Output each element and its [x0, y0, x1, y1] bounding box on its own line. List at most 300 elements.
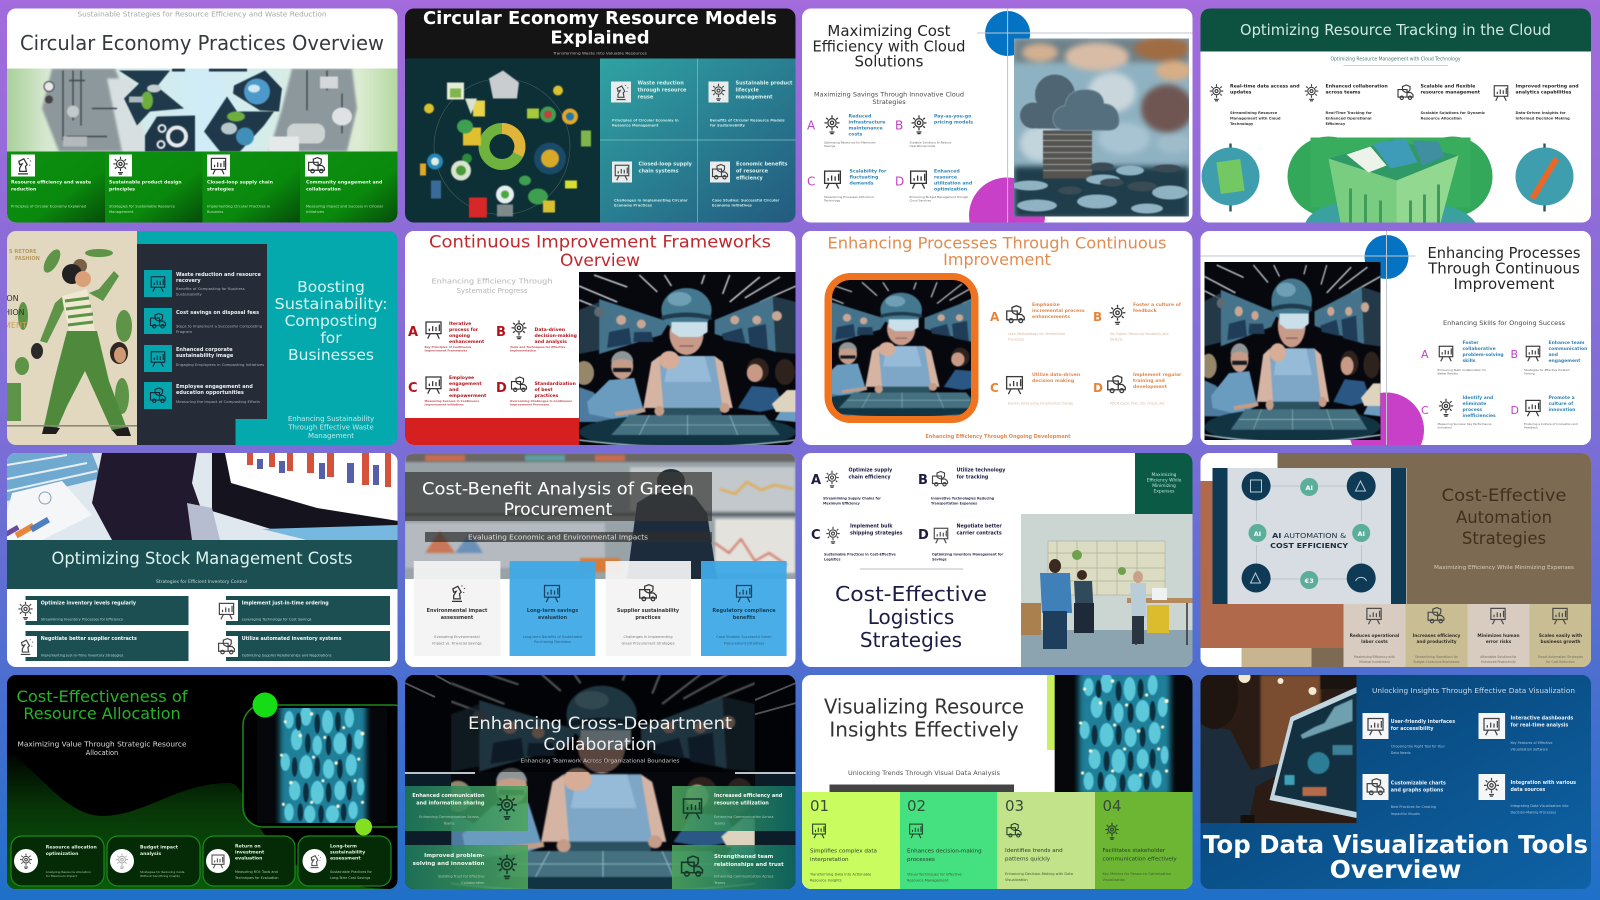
- card notes: Techniques for Evaluation: [234, 876, 279, 880]
- title: Efficiency with Cloud: [812, 38, 966, 56]
- feature headings: User-friendly interfaces: [1391, 719, 1455, 725]
- benefit tile: bottom right: Strengthened team: [714, 854, 774, 860]
- quadrant headings: through resource: [638, 88, 687, 94]
- item notes: Indicators: [1438, 426, 1452, 430]
- decorative green wave: [7, 750, 398, 889]
- item headings: Implement bulk: [850, 524, 893, 530]
- title: Resource Allocation: [23, 704, 181, 723]
- list headings: Waste reduction and resource: [176, 272, 262, 278]
- card headings: Resource allocation: [46, 844, 97, 850]
- item headings: Implement regular: [1133, 372, 1182, 378]
- column notes: Business: [207, 210, 223, 214]
- benefit headings: business growth: [1541, 639, 1580, 645]
- item letters: D: [1510, 404, 1519, 417]
- item headings: communication: [1548, 346, 1587, 352]
- item headings: Optimize supply: [848, 468, 893, 474]
- item notes: Defects: [1110, 338, 1123, 342]
- item letters: A: [408, 325, 418, 340]
- image: cloud on coins: [1012, 36, 1193, 218]
- title: Overview: [1330, 855, 1461, 884]
- illustration: woman with leaves: HION: [4, 308, 25, 317]
- list notes: Program: [176, 329, 192, 334]
- panel: Continuous Improvement Frameworks Overview: [405, 231, 796, 450]
- column notes: Resource Insights: [810, 878, 842, 882]
- item headings: collaborative: [1462, 346, 1496, 352]
- subtitle: Enhancing Skills for Ongoing Success: [1443, 321, 1565, 327]
- column notes: [809, 872, 1171, 882]
- list headings: [176, 272, 262, 396]
- item headings: Scalability for: [850, 168, 887, 174]
- benefit tile: bottom left: [405, 845, 528, 889]
- feature notes: Best Practices for Creating: [1391, 805, 1436, 809]
- illustration: woman with leaves: ION: [4, 294, 19, 303]
- benefit tile: bottom right: Teams: [713, 881, 725, 885]
- benefit notes: Affordable Solutions for: [1480, 655, 1517, 659]
- title: Top Data Visualization Tools: [1203, 830, 1588, 859]
- list icons: [144, 270, 172, 409]
- item notes: Transportation Expenses: [931, 502, 977, 506]
- list notes: Measuring the Impact of Composting Efforts: [176, 399, 260, 404]
- subtitle: Management: [308, 432, 354, 440]
- subtitle: Enhancing Efficiency Through: [432, 278, 552, 286]
- feature notes: Data Needs: [1391, 751, 1411, 755]
- panel: Circular Economy Practices Overview: [7, 8, 398, 222]
- title: Strategies: [1462, 529, 1546, 548]
- feature headings: Customizable charts: [1391, 780, 1446, 786]
- item letters: B: [1093, 310, 1102, 324]
- card headings: evaluation: [235, 856, 262, 862]
- item notes: Maximum Efficiency: [823, 502, 861, 506]
- item notes: [1008, 332, 1168, 406]
- list notes: Leveraging Technology for Cost Savings: [242, 618, 312, 622]
- item headings: Employee: [449, 375, 474, 381]
- list headings: Negotiate better supplier contracts: [41, 636, 137, 642]
- column headings: strategies: [207, 186, 234, 192]
- subtitle: Strategies: [872, 98, 906, 106]
- column headings: principles: [109, 186, 135, 192]
- feature notes: Choosing the Right Tool for Your: [1391, 744, 1445, 748]
- feature notes: Visualization Software: [1510, 748, 1548, 752]
- title: Circular Economy Resource Models: [423, 8, 777, 29]
- subtitle: Unlocking Trends Through Visual Data Analysis: [848, 769, 1001, 777]
- column numbers: 04: [1102, 797, 1122, 815]
- quadrant icons: [611, 82, 730, 182]
- column notes: [11, 205, 384, 214]
- feature notes: Streamlining Resource: [1230, 111, 1278, 115]
- item headings: decision-making: [534, 333, 577, 339]
- feature notes: Key Features of Effective: [1510, 741, 1553, 745]
- feature notes: Impactful Visuals: [1391, 812, 1420, 816]
- illustration: dashboards and analyst: [5, 453, 398, 540]
- quadrant notes: for Sustainability: [710, 124, 746, 128]
- title: Improvement: [943, 250, 1051, 269]
- benefit tile: bottom left: Collaboration: [461, 881, 484, 885]
- item letters: A: [990, 310, 1000, 324]
- item headings: utilization and: [934, 180, 972, 186]
- item headings: [848, 114, 973, 192]
- title: Optimizing Resource Tracking in the Cloud: [1240, 21, 1551, 39]
- list headings: education opportunities: [176, 390, 244, 396]
- item notes: Improvement Frameworks: [424, 348, 467, 352]
- subtitle: [18, 740, 186, 757]
- item notes: Enhancing Team Collaboration for: [1438, 368, 1487, 372]
- item notes: Cloud Services: [910, 198, 931, 202]
- item notes: Lean Methodology for Streamlined: [1008, 332, 1065, 336]
- image: charts and businessman: [405, 453, 796, 579]
- accent dots: [252, 692, 372, 836]
- item notes: Overcoming Challenges in Continuous: [510, 399, 572, 403]
- panel: Cost-Benefit Analysis of Green Procurement: [405, 453, 796, 667]
- item letters: A: [1421, 348, 1429, 361]
- title: Insights Effectively: [829, 718, 1019, 742]
- item notes: Fostering a Culture of Innovation and: [1524, 422, 1578, 426]
- item headings: [449, 321, 577, 399]
- feature headings: analytics capabilities: [1516, 90, 1572, 96]
- subtitle: Allocation: [86, 749, 118, 757]
- list headings: Implement just-in-time ordering: [242, 600, 329, 606]
- item headings: ongoing: [449, 333, 470, 339]
- title: Composting: [285, 312, 377, 330]
- image: woman at table: [1200, 262, 1380, 445]
- item letters: D: [1093, 381, 1103, 395]
- column headings: Enhances decision-making: [907, 848, 982, 854]
- title: [468, 714, 732, 755]
- item headings: [848, 468, 1006, 536]
- card headings: evaluation: [538, 615, 568, 621]
- item notes: Scalable Solutions to Reduce: [910, 140, 952, 144]
- title: [274, 278, 388, 364]
- orange framed image: [808, 273, 992, 423]
- title: [16, 687, 188, 723]
- feature icons: [1210, 84, 1508, 101]
- panel: Cost-Effectiveness of Resource Allocation: [7, 675, 413, 889]
- title: Optimizing Stock Management Costs: [52, 549, 352, 568]
- benefit notes: Smart Automation Strategies: [1538, 655, 1583, 659]
- card notes: Measuring ROI: Tools and: [235, 870, 278, 874]
- quadrant headings: Closed-loop supply: [638, 162, 693, 168]
- subtitle: Evaluating Economic and Environmental Impacts: [468, 534, 648, 542]
- item headings: optimization: [934, 186, 967, 192]
- quadrants: teal panels: [600, 58, 796, 222]
- benefit tile: top right: Enhancing Communication Across: [714, 815, 774, 819]
- quadrant notes: Challenges in Implementing Circular: [614, 198, 688, 202]
- item letters: D: [918, 528, 929, 543]
- feature notes: Resource Allocation: [1420, 116, 1462, 120]
- item headings: process: [1462, 407, 1482, 413]
- feature notes: Management with Cloud: [1230, 116, 1281, 120]
- card headings: assessment: [441, 615, 474, 621]
- list headings: recovery: [176, 278, 201, 284]
- column notes: Visual Techniques for Effective: [907, 872, 963, 876]
- item letters: D: [895, 174, 904, 188]
- card headings: Return on: [235, 844, 261, 850]
- item headings: pricing models: [934, 120, 973, 126]
- quadrant notes: Benefits of Circular Resource Models: [710, 118, 785, 122]
- item notes: [424, 345, 572, 406]
- item notes: Processes: [1008, 338, 1025, 342]
- subtitle: [814, 92, 964, 106]
- item headings: innovation: [1548, 407, 1576, 413]
- item letters: C: [1421, 404, 1429, 417]
- image: AI automation diagram: AI: [1357, 530, 1365, 538]
- item headings: Identify and: [1462, 395, 1493, 401]
- item notes: Tools and Techniques for Effective: [510, 345, 565, 349]
- card headings: analysis: [140, 851, 161, 857]
- list headings: sustainability image: [176, 353, 234, 359]
- card notes: Challenges in Implementing: [623, 635, 673, 639]
- column notes: Resource Management: [907, 878, 949, 882]
- illustration: woman with leaves: FASHION: [15, 256, 40, 262]
- card notes: Analyzing Resource Allocation: [46, 870, 91, 874]
- card headings: Long-term savings: [527, 608, 578, 614]
- benefit notes: Budget-Conscious Businesses: [1413, 660, 1460, 664]
- numbered columns: [802, 792, 1193, 889]
- panel: Cost-Effective Logistics Strategies: [802, 453, 1193, 667]
- card headings: assessment: [330, 856, 361, 862]
- callout: green tag: [1135, 453, 1193, 514]
- item letters: C: [811, 528, 821, 543]
- item headings: costs: [848, 132, 863, 138]
- callout: green tag: Maximizing: [1152, 472, 1177, 478]
- item headings: inefficiencies: [1462, 413, 1496, 419]
- title: Enhancing Processes Through Continuous: [828, 234, 1166, 252]
- item letters: [1421, 348, 1519, 417]
- feature notes: Scalable Solutions for Dynamic: [1420, 111, 1485, 115]
- feature headings: Integration with various: [1510, 780, 1576, 786]
- item headings: feedback: [1133, 308, 1158, 314]
- illustration: woman with leaves: [4, 231, 137, 445]
- column notes: Management: [109, 210, 134, 214]
- image: AI automation diagram: AI AUTOMATION &: [1272, 532, 1347, 540]
- item headings: culture of: [1548, 401, 1573, 407]
- panel: Top Data Visualization Tools Overview: [1190, 661, 1592, 889]
- card notes: Without Sacrificing Quality: [140, 874, 180, 878]
- title: [422, 480, 694, 520]
- subtitle: Optimizing Resource Management with Cloud Technology: [1330, 56, 1461, 62]
- item headings: engagement: [449, 381, 482, 387]
- item letters: B: [496, 325, 506, 340]
- list notes: [176, 286, 264, 404]
- item notes: Six Sigma: Reducing Variability and: [1110, 332, 1168, 336]
- item headings: Enhanced: [934, 168, 960, 174]
- item notes: [1438, 368, 1578, 430]
- list headings: Utilize automated inventory systems: [242, 636, 342, 642]
- column numbers: [810, 797, 1122, 815]
- illustration: woman with leaves: S RETORE: [9, 249, 37, 255]
- item headings: engagement: [1548, 358, 1581, 364]
- decorative circles: [969, 8, 1192, 222]
- column headings: communication effectively: [1102, 856, 1177, 862]
- column headings: reduction: [11, 186, 36, 192]
- item letters: C: [408, 381, 418, 396]
- list headings: Enhanced corporate: [176, 347, 233, 353]
- title: [828, 234, 1166, 269]
- column notes: Strategies for Sustainable Resource: [109, 204, 176, 208]
- image: recycling machinery: [7, 68, 398, 152]
- item letters: [811, 473, 929, 543]
- feature headings: [1230, 84, 1578, 94]
- item headings: shipping strategies: [850, 530, 903, 536]
- item headings: empowerment: [449, 393, 487, 399]
- title: [824, 694, 1024, 742]
- feature headings: Real-time data access and: [1230, 84, 1300, 90]
- benefit headings: Reduces operational: [1350, 633, 1400, 639]
- card notes: Strategies for Reducing Costs: [140, 870, 185, 874]
- benefit tile: top left: and information sharing: [416, 800, 485, 806]
- feature headings: Improved reporting and: [1516, 84, 1579, 90]
- card notes: [46, 870, 373, 880]
- feature headings: for real-time analysis: [1510, 722, 1568, 728]
- benefit tile: top right: Increased efficiency and: [714, 793, 783, 799]
- title: Cost-Effective: [835, 582, 987, 606]
- lime accent stripe: [1047, 675, 1055, 750]
- card headings: investment: [235, 850, 265, 856]
- panel: Cost-Effective Automation Strategies: [1200, 453, 1592, 667]
- item headings: training and: [1133, 378, 1165, 384]
- item headings: and analysis: [534, 339, 567, 345]
- feature notes: [1391, 741, 1569, 816]
- item headings: Foster a culture of: [1133, 302, 1182, 308]
- subtitle: Through Effective Waste: [287, 424, 374, 432]
- item notes: Implementation: [510, 348, 536, 352]
- item letters: C: [990, 381, 999, 395]
- benefit notes: Minimal Investment: [1359, 660, 1391, 664]
- title: Sustainability:: [274, 295, 388, 313]
- image: glass bottles: [1055, 670, 1193, 797]
- card notes: Case Studies: Successful Green: [716, 635, 772, 639]
- item icons: [1439, 346, 1540, 416]
- quadrant notes: Economy Practices: [614, 204, 652, 208]
- item notes: Solving: [1524, 372, 1535, 376]
- column headings: Facilitates stakeholder: [1102, 848, 1166, 854]
- column headings: Simplifies complex data: [810, 848, 877, 854]
- card headings: Regulatory compliance: [712, 608, 776, 614]
- subtitle: Unlocking Insights Through Effective Data Visualization: [1372, 687, 1575, 695]
- column headings: collaboration: [306, 186, 341, 192]
- item notes: Feedback: [1524, 426, 1538, 430]
- item headings: skills: [1462, 358, 1476, 364]
- subtitle: [432, 278, 552, 295]
- item notes: Streamlining Processes with Cloud: [824, 195, 874, 199]
- benefit notes: Maximizing Efficiency with: [1354, 655, 1395, 659]
- title: Through Continuous: [1427, 260, 1580, 278]
- subtitle: Strategies for Efficient Inventory Control: [156, 579, 247, 585]
- panel: Enhancing Processes Through Continuous Improvement, blue-purple: [1200, 231, 1592, 468]
- column icons: [813, 823, 1119, 839]
- benefit notes: Streamlining Operations for: [1415, 655, 1459, 659]
- benefit tile: bottom right: Enhancing Communication Across: [714, 874, 774, 878]
- columns: green feature band: [7, 152, 398, 222]
- benefit tile: bottom left: solving and innovation: [413, 861, 485, 867]
- benefit tile: top left: Enhanced communication: [412, 793, 485, 799]
- title: Enhancing Processes: [1428, 244, 1581, 262]
- item notes: Technology: [823, 198, 840, 202]
- title: Procurement: [504, 500, 613, 520]
- column numbers: 01: [810, 797, 829, 815]
- benefit headings: Increases efficiency: [1413, 633, 1461, 639]
- panel: Enhancing Processes Through Continuous Improvement, orange: [802, 231, 1193, 445]
- column notes: Visualization: [1102, 878, 1125, 882]
- item headings: decision making: [1032, 378, 1074, 384]
- column headings: Resource efficiency and waste: [11, 180, 91, 186]
- column notes: Principles of Circular Economy Explained: [11, 204, 86, 208]
- card headings: Environmental impact: [427, 608, 488, 614]
- item notes: Streamlining Supply Chains for: [823, 496, 881, 500]
- card notes: Purchasing Decisions: [534, 640, 571, 644]
- column notes: Enhancing Decision-Making with Data: [1005, 872, 1073, 876]
- item headings: Iterative: [449, 321, 471, 327]
- item headings: carrier contracts: [956, 530, 1002, 536]
- card headings: [427, 608, 776, 621]
- item headings: chain efficiency: [848, 474, 891, 480]
- item headings: [1032, 302, 1182, 390]
- benefit tile: bottom left: Improved problem-: [424, 853, 485, 859]
- column notes: Implementing Circular Practices in: [207, 204, 271, 208]
- title: Circular Economy Practices Overview: [20, 31, 384, 55]
- item notes: Key Principles of Continuous: [424, 345, 472, 349]
- title: Cost-Effectiveness of: [16, 687, 188, 706]
- item letters: B: [895, 118, 903, 132]
- subtitle: Maximizing Savings Through Innovative Cloud: [814, 90, 964, 98]
- benefit notes: [1354, 655, 1583, 664]
- item headings: Data-driven: [534, 327, 565, 333]
- feature notes: Technology: [1230, 122, 1254, 126]
- subtitle: Enhancing Sustainability: [288, 415, 374, 423]
- dark list panel: [137, 244, 267, 445]
- title: Continuous Improvement Frameworks: [429, 232, 771, 252]
- quadrant notes: [612, 118, 785, 208]
- feature headings: for accessibility: [1391, 726, 1434, 732]
- item headings: [1462, 340, 1587, 419]
- item letters: [807, 118, 904, 188]
- quadrant notes: Principles of Circular Economy in: [612, 118, 679, 122]
- column headings: Closed-loop supply chain: [207, 180, 273, 186]
- column notes: Measuring Impact and Success in Circular: [306, 204, 384, 208]
- column headings: [11, 180, 382, 192]
- item notes: Savings: [932, 558, 947, 562]
- card headings: benefits: [733, 615, 755, 621]
- list notes: Sustainability: [176, 292, 202, 296]
- title: [423, 8, 777, 48]
- item letters: [408, 325, 507, 396]
- title: Maximizing Cost: [827, 22, 951, 40]
- column notes: Transforming Data into Actionable: [809, 872, 872, 876]
- benefit tile: bottom right: [672, 845, 796, 889]
- image: AI automation diagram: [1212, 468, 1406, 604]
- subtitle: Maximizing Efficiency While Minimizing Expenses: [1434, 565, 1574, 571]
- subtitle: [287, 415, 374, 440]
- column notes: Key Metrics for Resource Optimization: [1102, 872, 1171, 876]
- benefit tile: bottom right: relationships and trust: [714, 862, 784, 868]
- quadrant headings: reuse: [638, 94, 654, 100]
- item headings: of best: [534, 387, 553, 393]
- decorative circles: [1200, 231, 1424, 468]
- item notes: Operational Costs: [910, 144, 936, 148]
- feature headings: updates: [1230, 90, 1252, 96]
- quadrant notes: Resource Management: [612, 124, 659, 128]
- image: AI automation diagram: €3: [1304, 577, 1314, 585]
- list notes: Implementing Just-in-Time Inventory Strategies: [41, 654, 124, 658]
- benefit tile: top left: [405, 786, 528, 831]
- image: AI automation diagram: COST EFFICIENCY: [1270, 542, 1349, 550]
- column notes: Initiatives: [306, 210, 324, 214]
- benefit tile: top right: resource utilization: [714, 800, 769, 806]
- item headings: eliminate: [1462, 401, 1486, 407]
- panel: Boosting Sustainability Composting for Businesses: [4, 231, 398, 445]
- column headings: Community engagement and: [306, 180, 382, 186]
- item headings: incremental process: [1032, 308, 1085, 314]
- item headings: problem-solving: [1462, 352, 1504, 358]
